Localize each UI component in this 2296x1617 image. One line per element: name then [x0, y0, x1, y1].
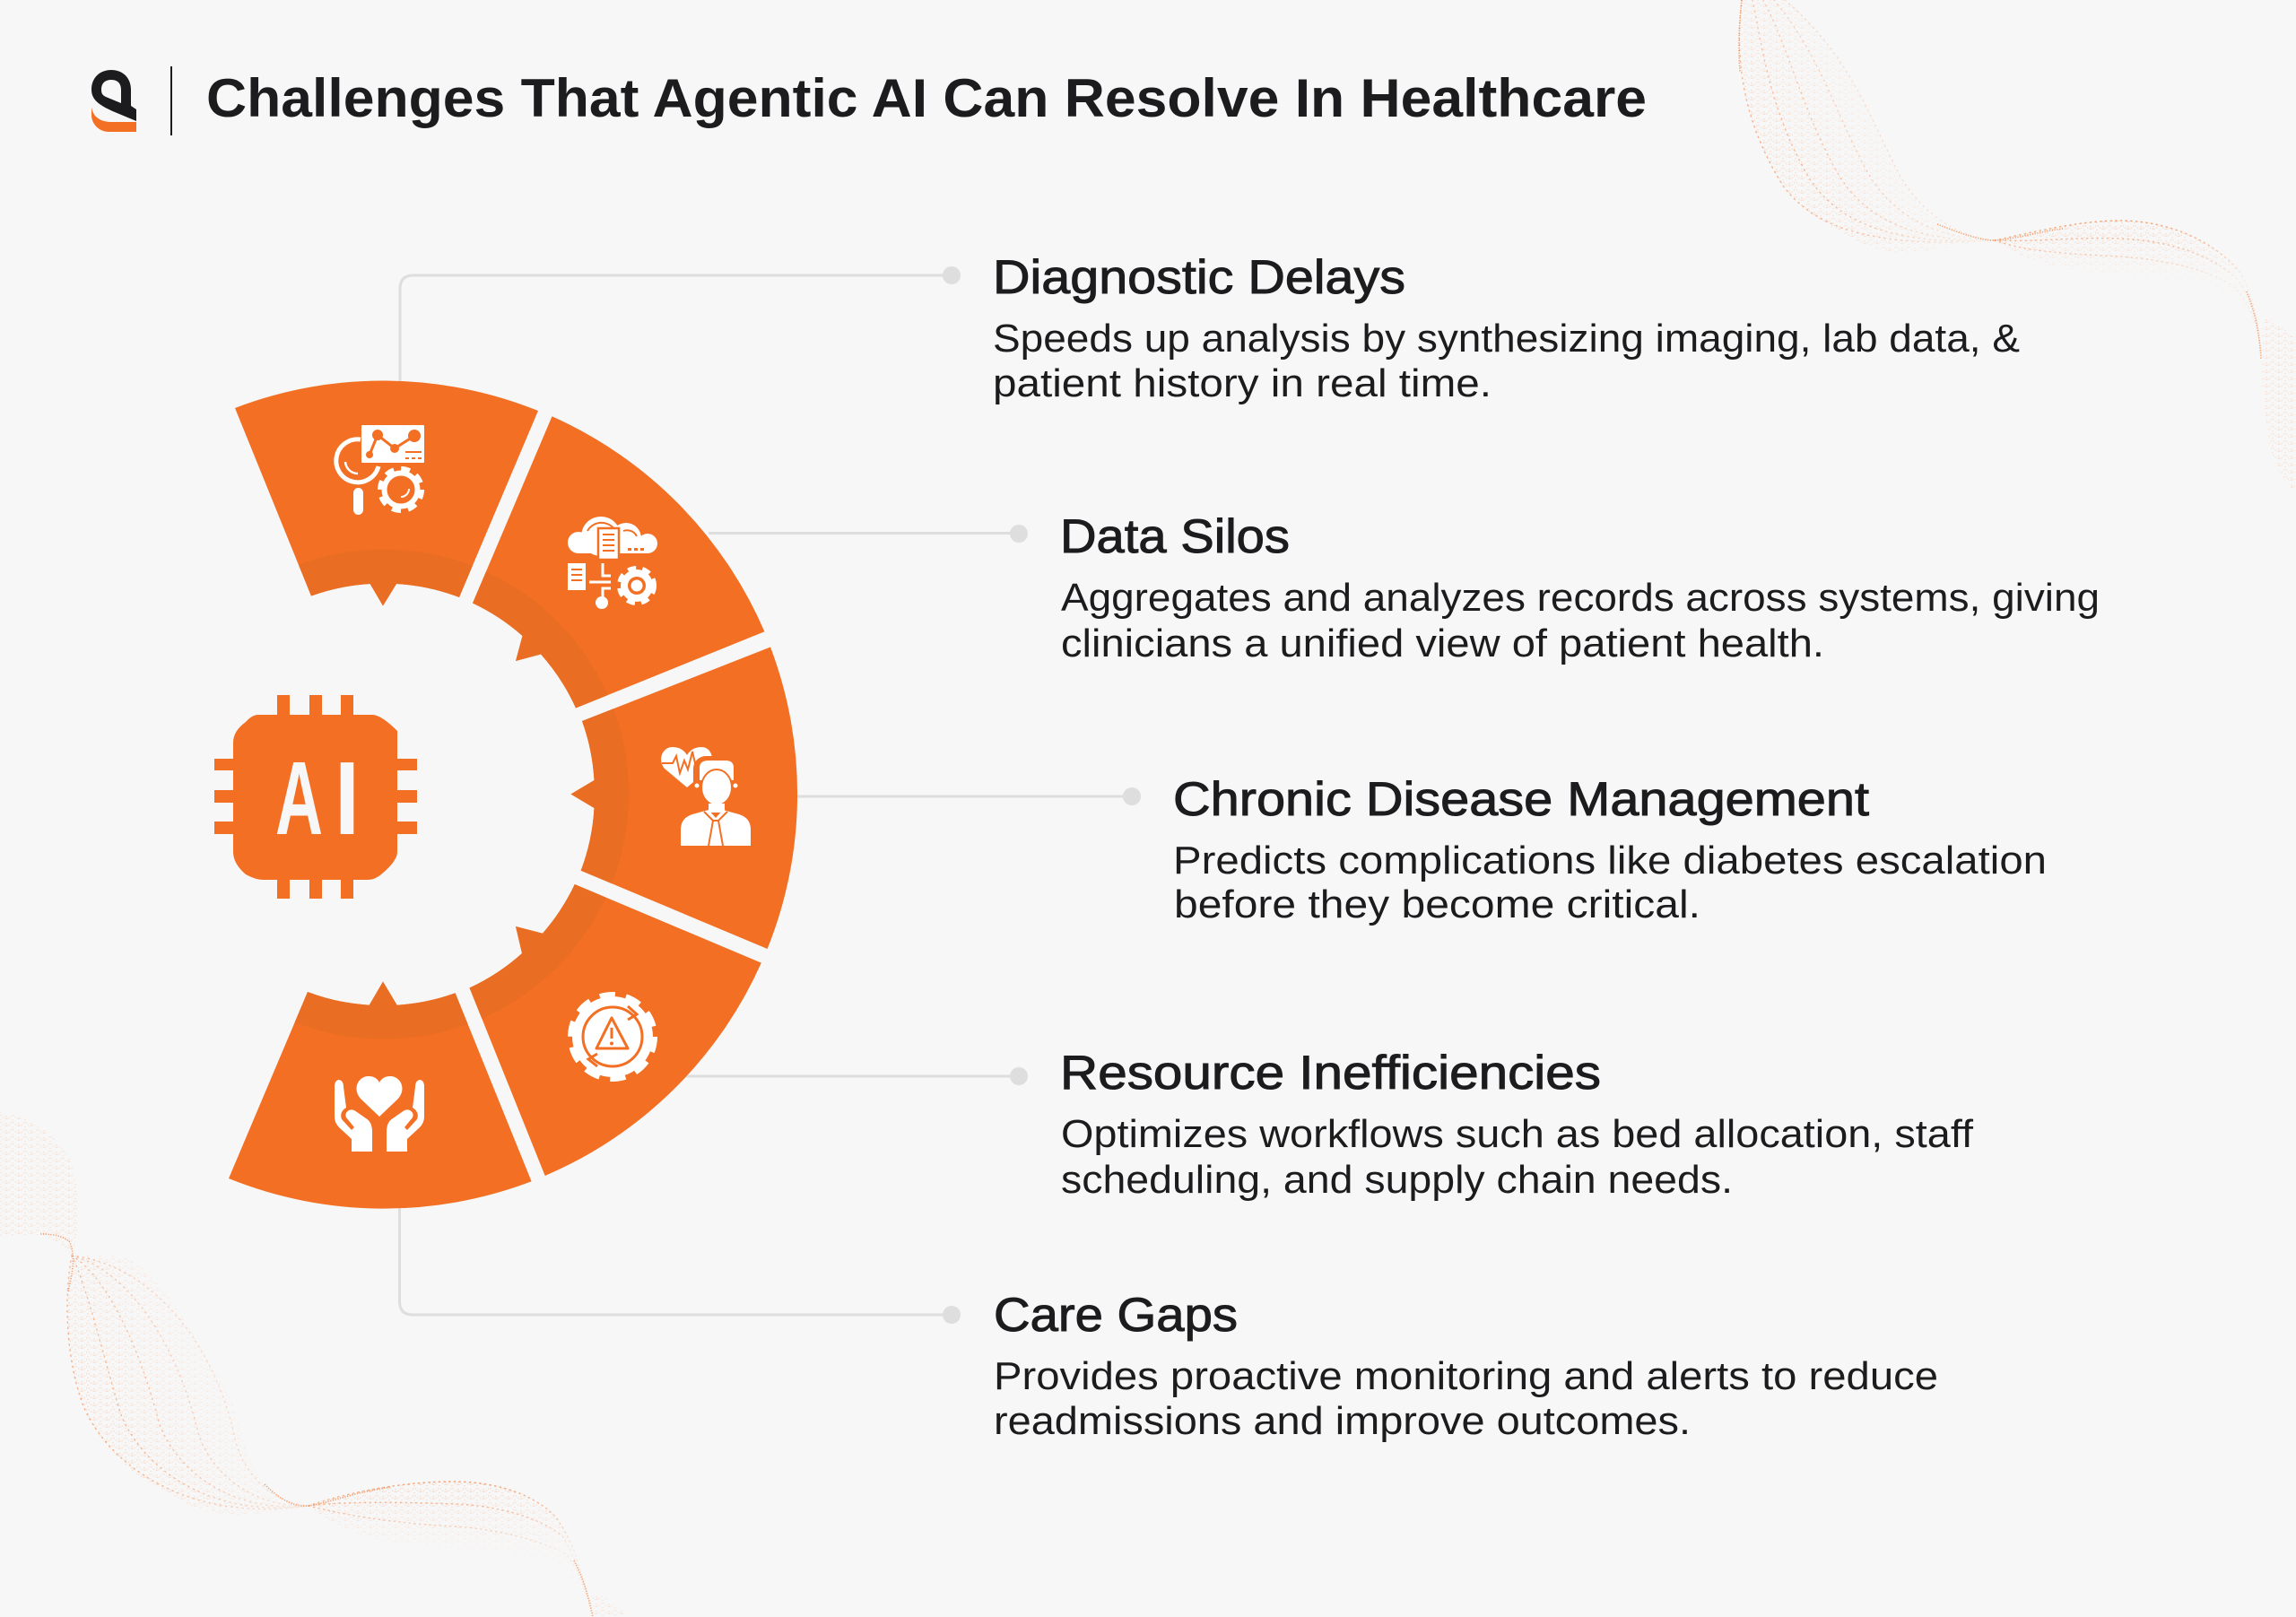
- connector: chronic disease management: [794, 787, 1141, 805]
- ring segment 3: [570, 648, 797, 949]
- text block: Care Gaps: [994, 1289, 1938, 1443]
- description: [994, 1354, 1938, 1443]
- header divider: [170, 66, 172, 135]
- inner shadow band of ring: [294, 549, 629, 1039]
- text block: Data Silos: [1060, 510, 2100, 665]
- description: Optimizes workflows such as bed allocation, staff: [1061, 1112, 1974, 1156]
- heading: Data Silos: [1060, 510, 1290, 563]
- title: Challenges That Agentic AI Can Resolve In Healthcare: [206, 68, 1647, 128]
- icon: diagnostic analytics: [336, 425, 424, 515]
- decorative dotted wave: top right: [1739, 0, 2296, 493]
- description: clinicians a unified view of patient health.: [1061, 622, 1824, 665]
- description: patient history in real time.: [993, 361, 1492, 405]
- heading: Diagnostic Delays: [993, 251, 1405, 304]
- connector: resource inefficiencies: [682, 1067, 1028, 1085]
- logo: [91, 70, 136, 132]
- text block: Resource Inefficiencies: [1060, 1047, 1974, 1202]
- text block: Diagnostic Delays: [993, 251, 2020, 405]
- description: readmissions and improve outcomes.: [994, 1399, 1691, 1443]
- description: [1061, 1112, 1974, 1202]
- description: Provides proactive monitoring and alerts to reduce: [994, 1354, 1938, 1398]
- description: [993, 317, 2020, 405]
- description: scheduling, and supply chain needs.: [1061, 1158, 1733, 1202]
- heading: Care Gaps: [994, 1289, 1238, 1342]
- ring segment 2: [473, 416, 764, 709]
- connector: care gaps: [400, 1206, 961, 1324]
- text block: Chronic Disease Management: [1173, 773, 2047, 926]
- icon: data silos cloud: [568, 517, 657, 609]
- description: Predicts complications like diabetes escalation: [1173, 839, 2047, 882]
- ring segment 1: [235, 380, 538, 606]
- icon: AI chip: [214, 695, 417, 899]
- heading: Chronic Disease Management: [1173, 773, 1869, 826]
- connector: data silos: [709, 525, 1028, 543]
- ring segment 4: [470, 884, 761, 1176]
- icon: AI chip: I: [335, 740, 360, 856]
- description: [1061, 576, 2100, 665]
- icon: AI chip: A: [275, 740, 323, 856]
- decorative dotted wave: bottom left: [0, 1112, 628, 1617]
- description: [1173, 839, 2047, 926]
- description: Speeds up analysis by synthesizing imaging, lab data, &: [993, 317, 2020, 361]
- heading: Resource Inefficiencies: [1060, 1047, 1601, 1100]
- description: before they become critical.: [1174, 882, 1700, 926]
- description: Aggregates and analyzes records across systems, giving: [1061, 576, 2100, 620]
- ring segment 5: [229, 981, 532, 1209]
- icon: heart and patient: [661, 747, 751, 846]
- icon: caring hands with heart: [335, 1076, 424, 1152]
- connector: diagnostic delays: [400, 266, 961, 381]
- icon: warning gear: [571, 995, 654, 1078]
